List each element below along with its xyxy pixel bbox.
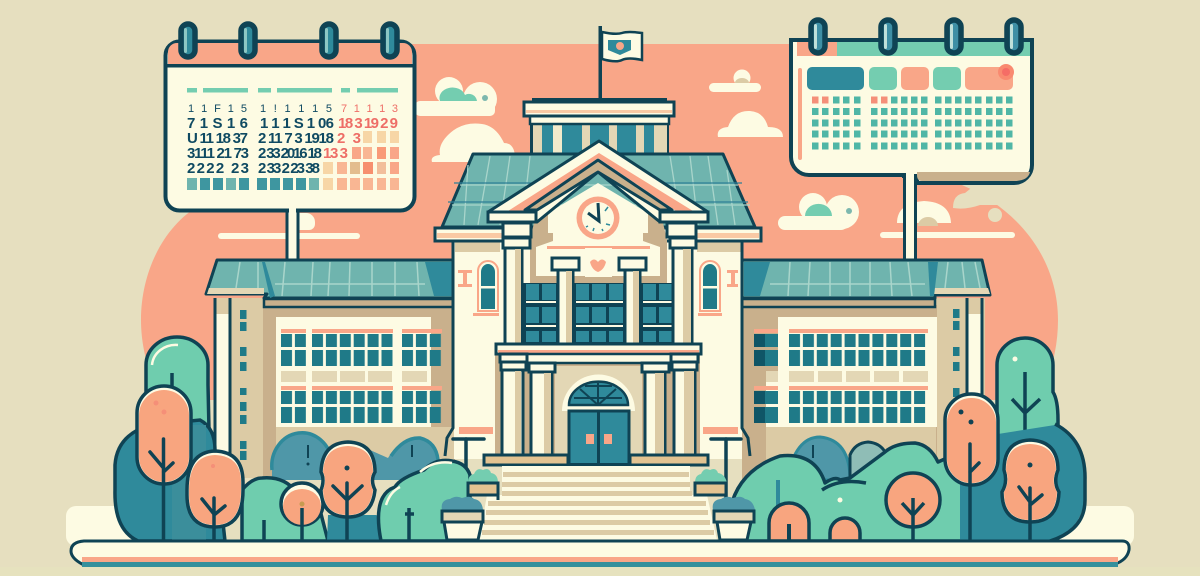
orange tree left two	[187, 451, 243, 541]
orange trees	[137, 386, 1059, 541]
calendar numbers dark: 7 1 S 1 6	[187, 115, 248, 132]
stairs	[479, 466, 717, 540]
calendar numbers dark: 2222 23	[187, 160, 249, 177]
left arched window	[478, 261, 498, 311]
calendar header right	[797, 42, 1030, 56]
lower left planter	[442, 497, 483, 540]
gable wall	[530, 210, 667, 290]
right wing wall	[935, 298, 985, 478]
calendar numbers dark: 2 33 2016 18	[258, 145, 322, 162]
calendar numbers dark: 1 ! 1 1 1 5	[260, 103, 332, 115]
mint tree right	[990, 338, 1058, 470]
left wing roof	[206, 260, 453, 298]
flag	[598, 26, 642, 100]
calendar body right	[791, 40, 1032, 183]
balcony	[496, 344, 701, 363]
back trees right	[728, 338, 1085, 541]
mint bush big left	[378, 460, 470, 541]
weekday bars	[187, 88, 398, 92]
arched fanlight	[569, 382, 628, 405]
right wing under-roof band	[742, 299, 935, 307]
ground strip right	[1050, 506, 1134, 546]
mint bush centre-left	[242, 478, 328, 541]
calendar numbers red	[323, 103, 398, 162]
calendar squares	[187, 131, 399, 190]
left wing	[206, 260, 455, 480]
emblem	[547, 246, 650, 277]
orange round tree left	[281, 483, 323, 541]
calendar numbers red: 7 1 1 1 3	[341, 103, 398, 115]
calendar numbers red: 18 3 19 2 9	[338, 115, 398, 132]
cloud: mid right	[718, 111, 783, 137]
calendar numbers red: 13 3	[323, 145, 348, 162]
main roof	[442, 154, 755, 227]
lower right planter	[713, 497, 755, 540]
left lamp	[453, 439, 484, 500]
left wing under-roof band	[264, 299, 454, 307]
cloud: beige right	[953, 185, 1002, 222]
calendar numbers dark: U 11 18 37	[187, 130, 248, 147]
calendar numbers dark	[187, 103, 334, 177]
right lamp	[711, 439, 741, 500]
cupola drum	[530, 118, 669, 156]
cloud: beneath right calendar pole	[880, 201, 1015, 238]
ground bar	[0, 541, 1200, 576]
orange tall tree left	[137, 386, 191, 541]
right arched window	[700, 261, 720, 311]
calendar numbers dark: 2 11 7 3 1918	[258, 130, 334, 147]
upper right planter	[695, 469, 727, 495]
right wing windows	[754, 329, 928, 423]
door	[569, 411, 629, 465]
calendar numbers dark: 2 33 2 23 38	[258, 160, 320, 177]
lower columns	[500, 354, 698, 455]
calendar header left	[168, 43, 412, 64]
calendar pole right	[904, 175, 916, 265]
rings right	[811, 20, 1021, 53]
orange tree left three	[321, 442, 375, 541]
porch base	[484, 455, 708, 465]
right tower small windows	[953, 309, 960, 397]
upper columns	[488, 212, 708, 344]
calendar grid	[812, 96, 1012, 150]
back trees left	[115, 337, 470, 541]
calendar numbers dark: 3111 21 73	[187, 145, 249, 162]
central block	[435, 141, 761, 466]
cloud: upper right	[709, 70, 761, 92]
calendar numbers dark: 1 1 1 S 1 06	[260, 115, 334, 132]
blue bushes left	[272, 433, 438, 480]
central glazing	[522, 283, 677, 344]
left calendar	[166, 24, 414, 262]
mint tree left	[146, 337, 209, 470]
mint bush big right	[728, 443, 965, 541]
calendar numbers red: 23	[337, 130, 361, 147]
right calendar	[791, 20, 1032, 265]
porch interior	[495, 353, 700, 455]
dark teal tree centre	[327, 515, 385, 541]
left wing windows	[281, 329, 442, 423]
potted plants	[442, 469, 755, 540]
ground strip left	[66, 506, 156, 546]
orange sprout two	[830, 518, 860, 541]
cupola band	[530, 116, 669, 124]
blue bush right	[787, 437, 850, 480]
orange round tree	[886, 473, 940, 527]
left wing cream panel	[276, 317, 431, 427]
colour blocks	[798, 64, 1014, 160]
left wing wall	[215, 298, 265, 478]
pediment	[488, 141, 708, 222]
clock	[576, 196, 620, 240]
coral backdrop shape	[141, 44, 1058, 400]
orange tree right two	[1002, 440, 1059, 541]
roof cornice	[435, 228, 761, 241]
cloud: under left calendar	[218, 213, 360, 239]
cupola	[524, 98, 674, 156]
orange tall tree right	[945, 394, 998, 541]
upper left planter	[468, 469, 498, 500]
cloud: upper left	[415, 77, 497, 116]
dark teal tree right	[960, 425, 1085, 541]
right wing	[742, 260, 990, 480]
rings left	[181, 24, 397, 57]
coral wall accents	[458, 270, 738, 434]
cloud: lower left	[432, 123, 515, 162]
orange sprout one	[769, 503, 809, 541]
cupola cornice	[524, 102, 674, 116]
central wall	[454, 241, 742, 459]
cloud: under right calendar	[778, 193, 859, 230]
right wing roof	[742, 260, 990, 298]
calendar body left	[166, 42, 414, 210]
door arch	[562, 374, 635, 411]
dark teal tree left	[115, 420, 225, 541]
calendar numbers dark: 1 1 F 1 5	[188, 103, 247, 115]
right wing cream panel	[778, 317, 937, 427]
calendar pole left	[287, 205, 298, 262]
left tower small windows	[240, 310, 246, 460]
